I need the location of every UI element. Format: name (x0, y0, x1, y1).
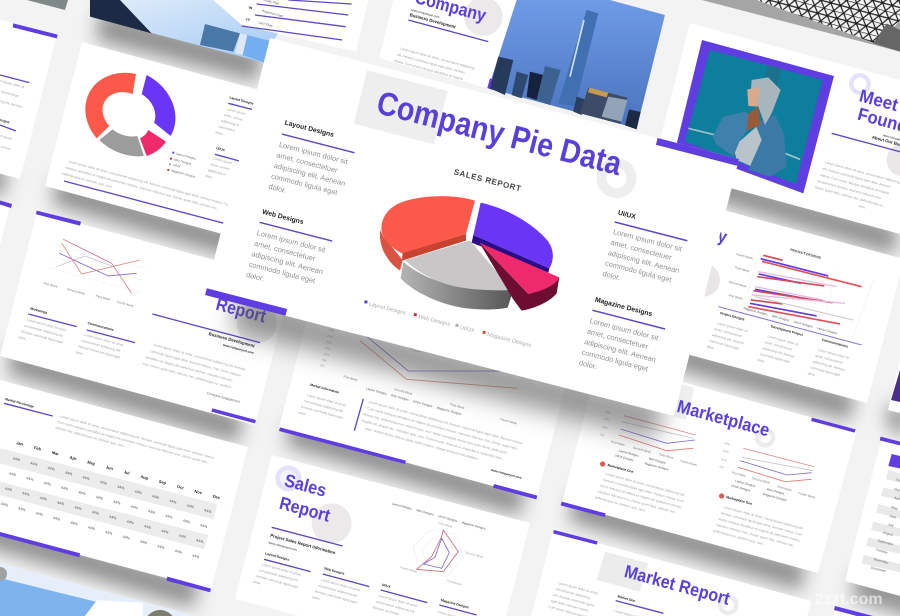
side notes: adipiscing el (221, 119, 240, 127)
slide: top table list: Last Slide (258, 20, 273, 28)
chart two: 30% (724, 441, 731, 447)
radar chart: Third Week (446, 579, 463, 587)
market one (614, 594, 663, 616)
intro text: Lorem ipsum dolor sit amet, (558, 581, 599, 596)
radar chart: Second Week (465, 550, 484, 559)
chart two: Layout Designs (735, 479, 756, 488)
bar chart: Fourth Week (736, 252, 754, 261)
slide: market information chart: www.companyurl.com (489, 467, 522, 480)
column: communications: dolor. (75, 350, 84, 356)
column: ui ux (372, 583, 427, 616)
side notes: Lorem ipsum (226, 107, 246, 116)
note: web designs: adipiscing elit. Aenean (251, 249, 324, 276)
pie slice: web designs red (380, 196, 475, 271)
donut legend: Magazine Designs (171, 168, 196, 179)
column: magazine designs (437, 598, 477, 616)
columns: amet, consectetuer (714, 327, 743, 338)
chart one: Second Week (632, 445, 652, 454)
intro text: elit. Aenean commodo ligula (553, 593, 594, 608)
note: layout designs: dolor. (268, 182, 287, 195)
note: ui ux: Lorem ipsum dolor sit (612, 227, 683, 253)
donut: red segment (85, 73, 136, 138)
body text: elit. Aenean commodo ligula eget dolor. Aenean (396, 52, 465, 75)
slide: project designs (609, 189, 900, 403)
city photo (487, 0, 665, 129)
chart axis labels: 25% (327, 334, 334, 339)
table values: 44% 44% 44% 44% 44% 44% 44% 44% 44% 44% 44% 44% (12, 456, 212, 514)
market information: consectetuer adipiscing elit. (304, 399, 344, 413)
report text block (142, 314, 260, 404)
note two (713, 493, 804, 555)
column: web designs: Web Designs (324, 566, 345, 576)
slide: market information chart: Second Week (394, 387, 413, 396)
slide: percentage table: ultricies nec, pellentesque eu, pretium quis, sem. (55, 426, 125, 448)
slide: market report (516, 530, 811, 616)
note: web designs: Lorem ipsum dolor sit (256, 228, 327, 255)
donut: grey segment (99, 129, 144, 156)
slide: market information chart: First Week (343, 374, 358, 382)
side notes: Lorem ipsum (213, 156, 233, 165)
donut legend: UI/UX (172, 163, 181, 169)
body text: fringilla vel, aliquet nec, vulputate eget, arcu. In enim justo, rhoncus ut, imperdiet a, venenatis vitae, (361, 419, 503, 461)
month bands (862, 470, 900, 572)
caption text: natoque penatibus et magnis dis parturient montes, nascetur ridiculus mus. Donec quam felis, ultricies nec, (65, 165, 218, 211)
slide: right calendar list (845, 437, 900, 616)
photo strip: bottom left (0, 563, 230, 616)
note one: sociis natoque penatibus et magnis dis parturient montes, (600, 483, 683, 510)
column: web designs: consectetuer adipiscing elit. (318, 584, 358, 598)
title: Company Pie Data (373, 84, 626, 182)
column: web designs (312, 566, 369, 611)
side notes (204, 95, 257, 184)
radar chart: First Week (438, 521, 453, 529)
pie legend (363, 300, 532, 349)
bar chart (728, 249, 873, 337)
line chart: Third Week (95, 294, 111, 302)
side notes: dolor. (204, 174, 213, 180)
note: web designs: amet, consectetuer (253, 239, 317, 263)
column: marketings: Lorem ipsum dolor sit amet, (26, 318, 67, 332)
market information: dolor. (298, 410, 307, 416)
subheading: Project Sales Report Information (270, 533, 336, 555)
main slide: company pie data (205, 38, 739, 416)
slide: percentage table: Lorem ipsum dolor sit amet, consectetuer adipiscing elit. Aenean commodo ligula eget dolor. Aenean massa. (60, 414, 215, 460)
grey circle (237, 303, 277, 343)
chart two: Second Week (751, 476, 771, 485)
side notes: dolor. (215, 130, 224, 136)
slide: marketplace (561, 359, 857, 573)
slide: far right photo (888, 360, 900, 413)
note two: pellentesque eu, pretium quis, sem. (713, 529, 765, 546)
line chart: First Week (43, 281, 58, 289)
side notes: adipiscing el (207, 168, 226, 177)
month labels: December (870, 565, 887, 574)
table values: 44% 44% 44% 44% 44% 44% 44% 44% 44% 44% 44% 44% (0, 502, 200, 560)
columns: amet, consectetuer (815, 354, 844, 365)
column: magazine designs: Magazine Designs (440, 598, 469, 610)
donut legend (167, 151, 197, 179)
slide: company with city photo (379, 0, 665, 129)
slide: top table list: 09 (248, 5, 253, 10)
chart two: 0% (719, 464, 725, 470)
chart lines (360, 333, 518, 388)
chart axis labels: 10% (323, 352, 330, 357)
slide: line chart and Report (0, 211, 292, 425)
market information: Aenean commodo ligula eget (301, 405, 343, 420)
report text block: Lorem ipsum dolor sit amet, consectetuer adipiscing elit. Aenean (153, 343, 246, 372)
note: magazine designs: Lorem ipsum dolor sit (589, 316, 659, 342)
slide: far left upper (0, 0, 58, 179)
chart two: Magazine Designs (762, 492, 788, 502)
grey title block (597, 552, 648, 592)
decor circle (464, 0, 503, 36)
photo frame (676, 40, 834, 193)
note: ui ux: amet, consectetuer (610, 238, 673, 262)
note: layout designs: amet, consectetuer (276, 150, 339, 175)
month header: Jan Feb Mar Apr May Jun Jul Aug Sep Oct Nov Dec (16, 440, 221, 500)
columns: commodo ligula eget (759, 352, 790, 364)
slide: sales report (235, 455, 530, 616)
table values: 44% 44% 44% 44% 44% 44% 44% 44% 44% 44% 44% 44% (4, 486, 204, 544)
slide: market information chart (279, 284, 574, 499)
side notes: amet, consec (224, 113, 244, 122)
column: ui ux: Aenean commodo (372, 605, 400, 616)
pie legend: Web Designs (418, 314, 451, 328)
report text block: Company Engagement (206, 391, 240, 404)
month labels: July (887, 522, 894, 528)
slide: top table list (213, 0, 368, 52)
note: ui ux: UI/UX (617, 210, 637, 221)
bar chart: Second Week (728, 280, 748, 289)
columns: Development Project (770, 324, 804, 337)
month labels: May (891, 505, 898, 511)
columns: adipiscing elit. Aenean (812, 359, 845, 372)
note: magazine designs: Magazine Designs (594, 297, 653, 318)
body text: massa. Cum sociis natoque penatibus et magnis (393, 58, 464, 81)
decor circle (851, 75, 869, 93)
column: web designs: Aenean commodo ligula eget (315, 589, 357, 604)
chart one: Third Week (658, 452, 674, 460)
heading fragment: Company (654, 209, 729, 247)
columns: Lorem ipsum dolor sit (716, 321, 748, 333)
chart one: Fourth Week (680, 459, 698, 467)
slide: top table list: Regional Chart (261, 9, 284, 18)
slide: percentage table (0, 378, 248, 592)
heading: Report: Report (214, 294, 268, 327)
donut: pink segment (140, 130, 166, 156)
note two: Marketplace Two (726, 495, 752, 506)
note: ui ux (601, 209, 691, 296)
report text block: commodo ligula eget dolor. Aenean massa. Cum sociis natoque (150, 349, 241, 378)
chart legend: Layout Designs Web Designs UI/UX Designs Magazine Designs (366, 386, 462, 416)
column: marketings: Aenean commodo ligula eget (21, 329, 63, 345)
column: communications: Lorem ipsum dolor sit amet, (84, 333, 124, 347)
chart two: Third Week (776, 484, 793, 492)
month labels: August (882, 530, 893, 537)
column: web designs: Lorem ipsum dolor sit amet, (320, 578, 361, 592)
column: layout designs: dolor. (253, 580, 262, 586)
side notes: commodo li (218, 124, 235, 133)
note: magazine designs: adipiscing elit. Aenean (583, 337, 657, 364)
photo strip: top left corner (27, 0, 68, 10)
slide: market information chart: Fourth Week (500, 417, 518, 426)
note: web designs (245, 209, 336, 298)
column: communications: consectetuer adipiscing elit. (81, 339, 121, 353)
table bands (0, 448, 217, 519)
columns: dolor. (757, 358, 766, 364)
column: layout designs (253, 551, 311, 595)
column: marketings (18, 306, 77, 351)
body text: dis parturient montes, nascetur ridiculus mus. (817, 179, 883, 200)
market information: Lorem ipsum dolor sit amet, (306, 393, 347, 408)
chart axis labels: 20% (325, 340, 333, 345)
body text: Lorem ipsum dolor sit amet, consectetuer adipiscing elit. Aenean commodo ligula eget dolor. Aenean massa. (368, 400, 523, 445)
side notes: UI/UX (216, 146, 226, 152)
body text: Donec quam felis, ultricies nec, pellentesque eu, (814, 185, 884, 208)
heading: report: Report (277, 493, 332, 526)
chart two: Web Designs (766, 487, 785, 496)
columns: amet, consectetuer (765, 340, 794, 352)
chart axis labels: 0% (320, 363, 325, 368)
column: marketings: consectetuer adipiscing elit. (24, 324, 64, 338)
note: web designs: Web Designs (261, 209, 304, 226)
decor circle lower (887, 143, 900, 177)
body text: ultricies nec, pellentesque eu, pretium quis, sem. Nulla consequat massa quis enim donec pede justo, (362, 412, 508, 455)
radar legend: Layout Designs Web Designs UI/UX Designs Magazine Designs (391, 501, 486, 531)
column: ui ux: Lorem ipsum dolor sit amet, (378, 594, 419, 608)
chart one: UI/UX Designs (614, 453, 635, 462)
columns: Lorem ipsum dolor sit (817, 348, 849, 360)
heading: marketplace: Marketplace (675, 396, 772, 440)
chart two: 10% (720, 457, 728, 463)
note: layout designs (268, 120, 358, 209)
pie legend: Layout Designs (368, 301, 407, 317)
month labels: June (889, 514, 897, 520)
column: communications: Aenean commodo ligula eget (78, 344, 121, 360)
note two: sociis natoque penatibus et magnis dis parturient montes, (718, 517, 801, 543)
side notes: Layout Designs (229, 95, 254, 106)
note: magazine designs: amet, consectetuer (586, 327, 650, 351)
contact text: www.companyurl.com (411, 8, 440, 19)
chart two: 20% (722, 449, 730, 454)
slide: top left photo (90, 0, 300, 63)
note: ui ux: commodo ligula eget (604, 259, 673, 284)
main slide shadow (232, 293, 665, 440)
column: layout designs: Layout Designs (265, 551, 290, 562)
columns: adipiscing elit. Aenean (711, 333, 744, 345)
note: magazine designs: dolor. (578, 358, 598, 371)
donut legend: Layout Designs (175, 151, 197, 161)
column: marketings: dolor. (18, 335, 27, 341)
month labels: September (877, 538, 895, 547)
subheading: Business Development (409, 12, 457, 30)
month labels (870, 478, 900, 574)
intro text: eget dolor. Aenean massa. (550, 599, 590, 613)
report text block: www.companyurl.com (221, 342, 254, 355)
note one: nascetur ridiculus mus. Donec quam felis, ultricies nec, (597, 489, 676, 514)
report text block: penatibus et magnis dis parturient montes, nascetur ridiculus (145, 355, 233, 382)
month labels: November (873, 557, 890, 565)
chart legend: Magazine Designs Web Designs UI/UX Designs Layout Designs (743, 306, 838, 335)
columns: Lorem ipsum dolor sit (767, 334, 799, 347)
columns: commodo ligula eget (709, 339, 739, 351)
grey title block (354, 70, 448, 144)
month labels: October (876, 548, 889, 555)
note: web designs: commodo ligula eget (248, 260, 316, 285)
columns: dolor. (706, 345, 715, 351)
chart two: Fourth Week (798, 491, 816, 500)
chart one: 20% (603, 416, 610, 422)
donut legend: Web Designs (173, 157, 192, 166)
body text: sem. (858, 204, 866, 210)
bar chart: Third Week (734, 265, 750, 273)
slide: market information chart: Third Week (449, 402, 465, 410)
slide: sales report: www.companyurl.com (268, 540, 298, 552)
caption text: Lorem ipsum dolor sit amet, consectetuer adipiscing elit. Aenean commodo ligula eget dolor. Aenean massa. Cum sociis (68, 159, 240, 210)
column: layout designs: consectetuer adipiscing elit. (259, 568, 299, 583)
column: web designs: dolor. (312, 595, 321, 601)
slide: bottom right (798, 606, 900, 616)
chart two (719, 441, 816, 502)
note: web designs: dolor. (245, 270, 265, 283)
note one: Marketplace One (607, 463, 634, 474)
market information: Market Information (310, 383, 340, 394)
chart two: UI/UX Designs (731, 484, 751, 493)
body text: elit. Aenean commodo ligula eget dolor. Aenean (822, 167, 891, 189)
bar chart: First Week (728, 293, 743, 301)
note: ui ux: dolor. (602, 269, 621, 282)
note: magazine designs (578, 297, 669, 385)
note two: nascetur ridiculus mus. Donec quam felis, ultricies nec, (715, 523, 795, 548)
slide: percentage table: Market Percentage (5, 397, 34, 409)
note one: pellentesque eu, pretium quis, sem. (595, 495, 646, 513)
heading: sales: Sales (282, 470, 329, 501)
chart one: Web Designs (648, 456, 666, 465)
note one: Lorem ipsum dolor sit amet, consectetuer adipiscing elit. (605, 472, 686, 497)
watermark: 2zzt.com (815, 591, 883, 608)
market one: Market One (617, 594, 636, 603)
chart axis labels: 30% (328, 328, 335, 333)
3d pie chart (380, 196, 559, 311)
pie slice: magazine designs pink (479, 243, 559, 311)
pie slice: layout designs purple (472, 203, 553, 273)
note one: Aenean commodo ligula eget dolor. Aenean massa. Cum (602, 478, 685, 504)
slide: project designs: PROJECT DESIGNS (790, 248, 822, 260)
slide: meet founder (653, 23, 900, 237)
market information (298, 383, 347, 426)
column: marketings: Marketings (30, 306, 48, 315)
note one (595, 461, 686, 522)
note two: Lorem ipsum dolor sit amet, consectetuer adipiscing elit. (723, 505, 804, 531)
decor ring (598, 160, 635, 196)
slide: percentage table: Cum sociis natoque penatibus et magnis dis parturient montes, nascetur ridiculus mus. Donec quam felis, (57, 420, 208, 465)
table values (0, 456, 212, 560)
decor circle (687, 263, 720, 297)
heading: market report: Market Report (622, 561, 732, 609)
slide: donut chart (45, 42, 337, 255)
chart one: Magazine Designs (644, 461, 669, 472)
chart two: First Week (731, 470, 747, 478)
note: magazine designs: commodo ligula eget (581, 348, 649, 373)
note: layout designs: adipiscing elit. Aenean (273, 161, 346, 188)
founder photo (685, 50, 823, 184)
radar chart (400, 521, 484, 587)
note: layout designs: commodo ligula eget (270, 171, 339, 197)
note: layout designs: Layout Designs (284, 120, 335, 139)
columns (706, 311, 849, 384)
chart axis labels (320, 328, 335, 368)
column: layout designs: Aenean commodo ligula eget (256, 574, 298, 589)
columns: adipiscing elit. Aenean (762, 346, 795, 359)
note: ui ux: adipiscing elit. Aenean (607, 248, 680, 275)
caption text: pellentesque eu, pretium quis, sem. (62, 171, 113, 189)
slide: far left second (0, 137, 12, 350)
accent bars (205, 288, 287, 316)
chart axis labels: 5% (321, 358, 327, 363)
chart one: Layout Designs (618, 448, 639, 458)
decor circles (278, 468, 299, 489)
chart one: 30% (605, 410, 612, 415)
body text: Lorem ipsum dolor sit amet, consectetuer adipiscing (400, 46, 475, 70)
report text block: Business Development (208, 331, 256, 349)
photo strip: top right lattice (702, 0, 900, 52)
chart one: 0% (600, 432, 605, 438)
radar chart: Fourth Week (400, 565, 418, 574)
note: layout designs: Lorem ipsum dolor sit (278, 140, 349, 166)
chart heading: SALES REPORT (453, 167, 522, 193)
chart one: 10% (601, 425, 609, 430)
donut: purple segment (142, 75, 175, 136)
pie legend: Magazine Designs (486, 332, 532, 349)
body text: massa. Cum sociis natoque penatibus et magnis (819, 173, 890, 196)
line chart (43, 239, 147, 308)
column: communications: Communications (87, 321, 114, 332)
columns: commodo ligula eget (810, 365, 840, 377)
chart one: First Week (610, 439, 626, 447)
decor (670, 383, 694, 420)
chart one (600, 410, 698, 472)
columns: Project Designs (720, 311, 745, 322)
body text: Lorem ipsum dolor sit amet, consectetuer adipiscing (825, 160, 900, 184)
line chart: Second Week (66, 287, 86, 296)
column: communications (75, 321, 135, 366)
line chart: Fourth Week (116, 300, 134, 308)
decor ring (720, 597, 736, 613)
body text: justo. Nullam dictum felis eu pede mollis pretium. Integer tincidunt cras dapibus. (364, 426, 479, 461)
column: layout designs: Lorem ipsum dolor sit amet, (261, 562, 302, 577)
column: ui ux: consectetuer adipiscing elit. (375, 600, 416, 614)
columns: Communications (821, 338, 849, 349)
table values: 44% 44% 44% 44% 44% 44% 44% 44% 44% 44% 44% 44% (8, 471, 208, 529)
slide: top table list: 10 (245, 17, 250, 22)
intro text: consectetuer adipiscing (556, 587, 590, 600)
side notes: amet, consec (210, 162, 231, 171)
pie legend: UI/UX (459, 325, 475, 334)
report text block: mus. Donec quam felis, ultricies nec, pellentesque eu, pretium (142, 362, 232, 389)
columns: dolor. (807, 371, 816, 377)
column: ui ux: UI/UX (381, 583, 392, 589)
note two: Aenean commodo ligula eget dolor. Aenean massa. Cum (721, 511, 803, 537)
pie slice: ui ux grey (401, 241, 513, 309)
chart axis labels: 15% (324, 346, 331, 351)
body text: Cum sociis natoque penatibus et magnis dis parturient montes, nascetur ridiculus mus. Donec quam felis, (367, 406, 518, 451)
